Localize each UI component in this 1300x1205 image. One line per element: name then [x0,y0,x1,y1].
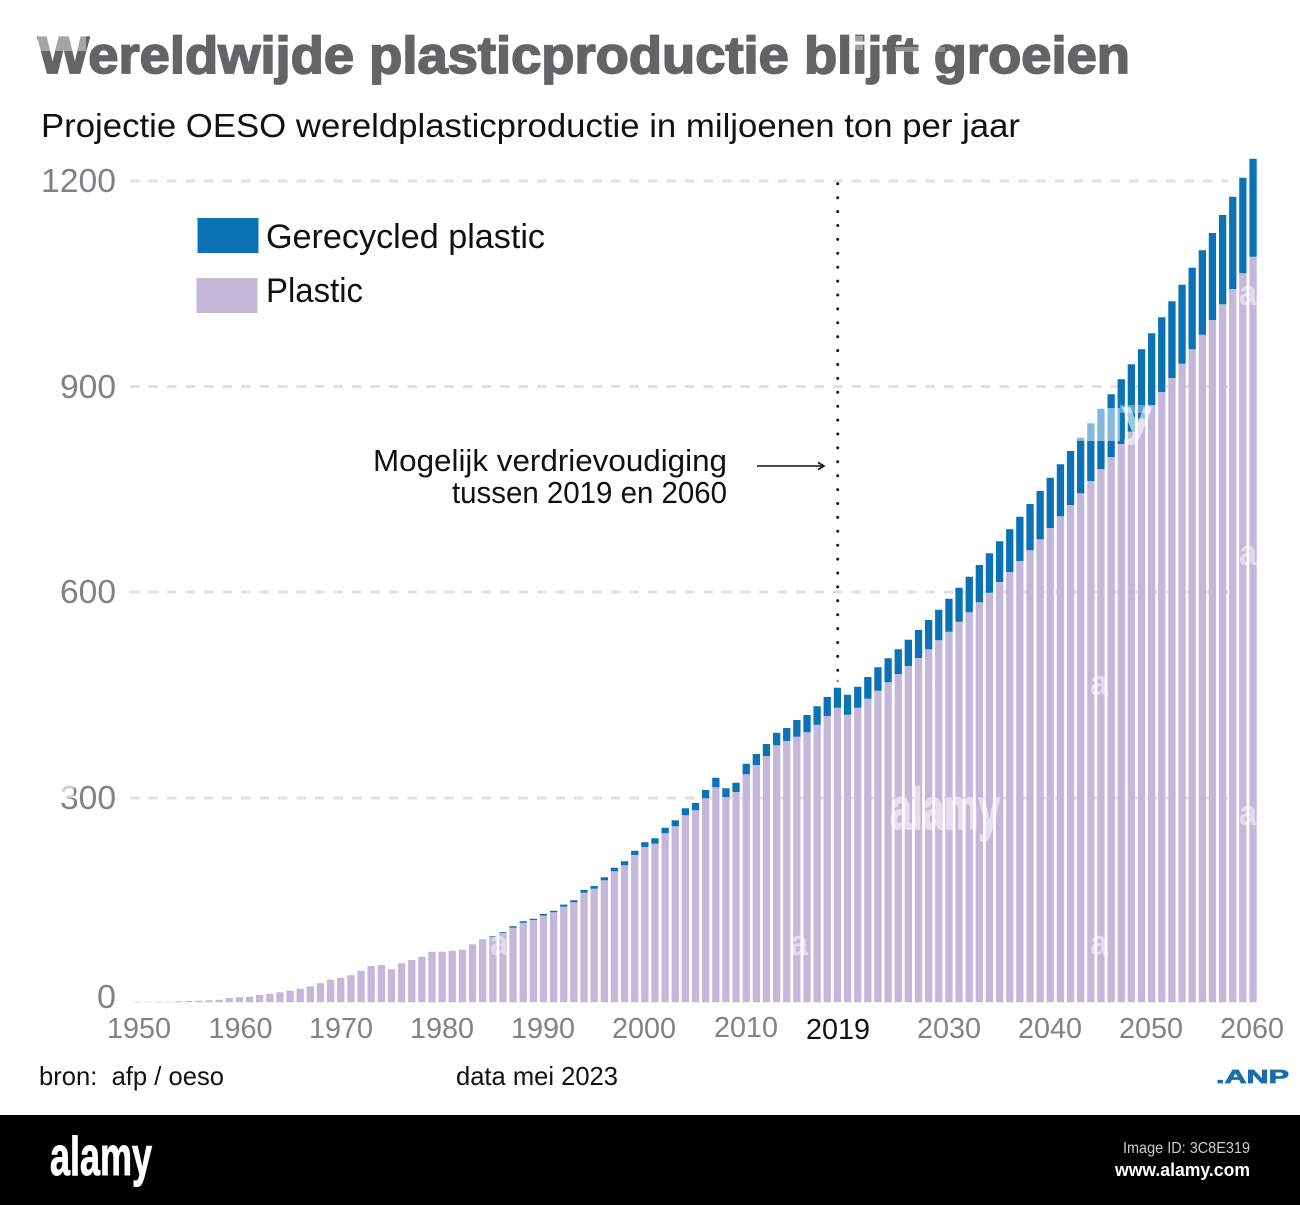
title: Wereldwijde plasticproductie blijft groeien [38,27,1130,85]
y-axis labels: 1200 [41,162,116,199]
alamy logo: alamy [50,1125,152,1187]
footer bar [0,1115,1300,1205]
alamy watermarks: a [1239,272,1258,313]
y-axis labels: 300 [60,779,116,816]
annotation text [373,443,727,510]
x-axis labels: 1970 [309,1013,373,1045]
alamy watermarks: a [1090,922,1109,963]
legend swatch: gerecycled plastic [198,218,258,253]
x-axis labels: 2050 [1119,1013,1183,1045]
bar chart: plastic production 1950-2060 [134,159,1257,1002]
x-axis labels [107,1012,1284,1046]
bars: recycled plastic [489,159,1257,937]
alamy watermarks: a [1239,532,1258,573]
x-axis labels: 1950 [107,1013,171,1045]
legend label: gerecycled plastic: Gerecycled plastic [266,218,545,256]
legend [196,218,545,313]
y-axis labels: 600 [60,573,116,610]
alamy watermarks: a [790,922,809,963]
x-axis labels: 2010 [714,1012,778,1044]
legend label: plastic: Plastic [266,272,363,310]
annotation text: Mogelijk verdrievoudiging [373,443,727,478]
source text: bron: afp / oeso [39,1061,224,1091]
y-axis labels: 0 [97,978,116,1015]
arrow [757,462,824,470]
x-axis labels: 1990 [511,1013,575,1045]
image id: Image ID: 3C8E319 [1123,1140,1250,1157]
alamy watermarks: a [1239,792,1258,833]
website: www.alamy.com [1114,1160,1250,1180]
ANP logo: .ANP [1216,1067,1289,1087]
x-axis labels: 1980 [410,1013,474,1045]
bars: plastic [134,257,1257,1002]
y-axis labels [41,162,116,1015]
x-axis labels: 2030 [917,1013,981,1045]
alamy watermarks: a [490,922,509,963]
x-axis labels: 2060 [1220,1013,1284,1045]
x-axis labels: 2000 [612,1013,676,1045]
alamy watermarks [490,272,1258,963]
legend swatch: plastic [196,278,258,313]
x-axis labels: 1960 [208,1013,272,1045]
alamy watermarks: a [1090,662,1109,703]
x-axis labels: 2040 [1018,1013,1082,1045]
alamy watermarks: alamy [890,777,1000,842]
2019 dotted marker line [836,184,839,682]
annotation text: tussen 2019 en 2060 [452,475,727,510]
subtitle: Projectie OESO wereldplasticproductie in miljoenen ton per jaar [41,107,1020,144]
data date text: data mei 2023 [456,1061,618,1091]
x-axis labels: 2019 [806,1014,870,1046]
y-axis labels: 900 [60,368,116,405]
alamy watermarks: y [1122,389,1152,445]
